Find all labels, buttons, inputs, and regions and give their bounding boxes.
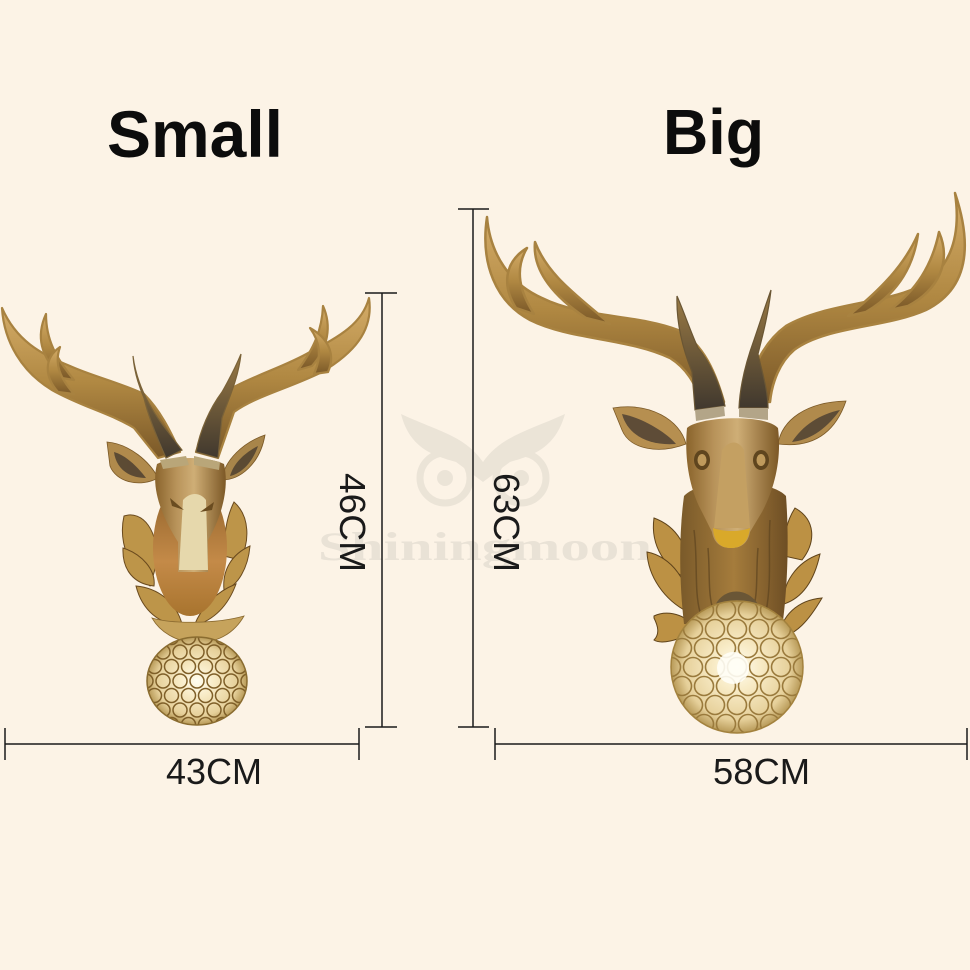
big lamp antlers [485,193,965,402]
label: big width: 58CM [713,751,810,792]
small lamp head [155,458,226,572]
label: big height: 63CM [486,473,527,572]
big lamp neck [680,482,788,628]
heading: Small: Small [107,97,283,171]
small lamp ears [107,435,265,483]
dimension: small height line [365,293,397,727]
heading: Big: Big [663,96,764,168]
big lamp eyes [694,450,769,470]
dimension: big height line [458,209,489,727]
small lamp muzzle highlight [179,494,208,570]
label: small height: 46CM [332,473,373,572]
big lamp collars [695,406,768,421]
dimension: big width line [495,728,967,760]
big lamp nose [713,528,750,548]
small lamp neck [153,480,227,616]
small lamp: deer head wall light [2,298,370,725]
big lamp ears [613,401,846,449]
big lamp fur strokes [694,520,770,612]
icon: owl watermark [401,414,565,503]
dimension lines [5,209,967,760]
small lamp inner tines [133,354,241,458]
label: small width: 43CM [166,751,262,792]
big lamp globe [671,601,803,733]
small lamp leaves [122,502,250,626]
big lamp nose bridge [714,442,750,528]
small lamp collars [160,456,220,470]
big lamp: deer head wall light [485,193,965,733]
big lamp pendant fitting [714,592,760,614]
watermark text: Shiningmoon [318,524,652,569]
watermark: owl logo and brand name [318,414,652,569]
small lamp eyes [170,498,214,512]
big lamp head [686,418,779,548]
big lamp leaves [647,508,822,642]
small lamp antlers [2,298,370,458]
big lamp inner tines [677,290,771,410]
small lamp globe [147,637,247,725]
small lamp crown [152,616,244,643]
dimension: small width line [5,728,359,760]
